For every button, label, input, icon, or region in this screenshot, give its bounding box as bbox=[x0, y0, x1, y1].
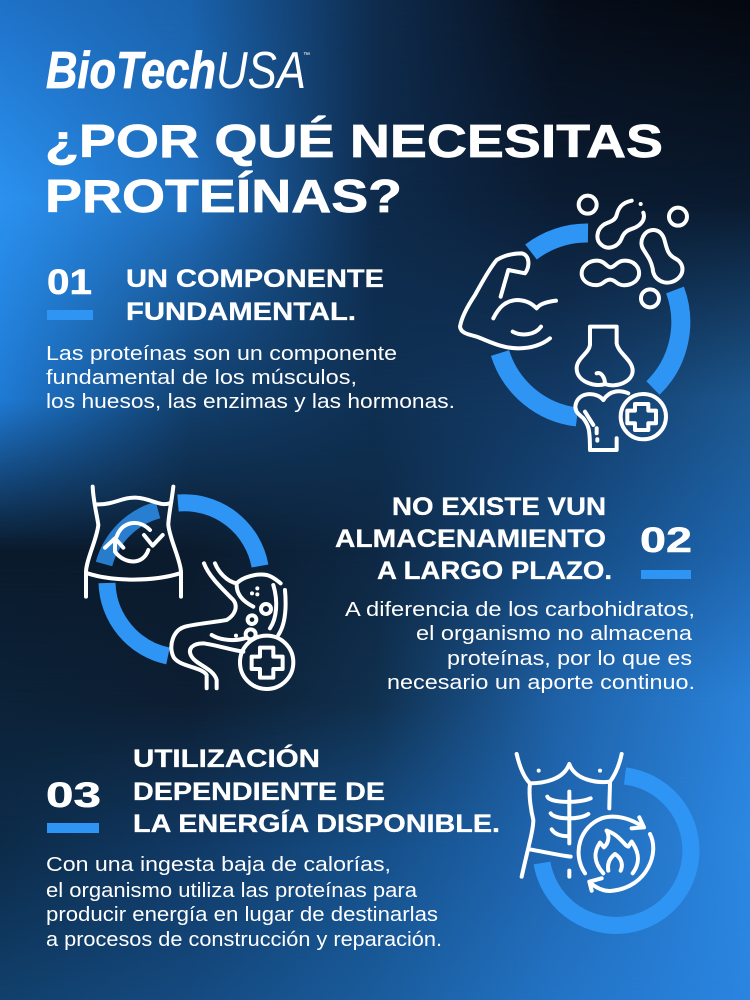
body text 02: proteínas, por lo que es bbox=[447, 648, 692, 670]
title: PROTEÍNAS? bbox=[45, 170, 402, 222]
panel: section 02 bbox=[335, 493, 695, 694]
body text 01: fundamental de los músculos, bbox=[46, 367, 357, 389]
panel: section 01 bbox=[46, 263, 455, 413]
ring arc bbox=[542, 776, 691, 925]
line drawing bbox=[86, 487, 293, 689]
ring arcs bbox=[500, 233, 681, 417]
heading 02: ALMACENAMIENTO bbox=[335, 525, 606, 553]
number 03: 03 bbox=[46, 776, 101, 815]
line drawing bbox=[517, 754, 653, 891]
body text 03: Con una ingesta baja de calorías, bbox=[46, 854, 391, 876]
body text 01: Las proteínas son un componente bbox=[46, 343, 397, 365]
heading 03 bbox=[133, 743, 500, 838]
bar 03 bbox=[47, 823, 99, 833]
bar 01 bbox=[47, 310, 93, 320]
logo: BioTech bbox=[46, 42, 216, 100]
panel: section 03 bbox=[46, 743, 500, 951]
heading 01: UN COMPONENTE bbox=[126, 265, 384, 293]
heading 01 bbox=[126, 265, 384, 326]
body text 03 bbox=[46, 854, 442, 951]
bar 02 bbox=[641, 570, 691, 579]
title bbox=[45, 115, 663, 222]
body text 02: necesario un aporte continuo. bbox=[387, 672, 695, 694]
heading 03: DEPENDIENTE DE bbox=[133, 778, 385, 806]
heading 02: NO EXISTE VUN bbox=[392, 493, 606, 521]
body text 02: el organismo no almacena bbox=[416, 623, 693, 645]
ring arcs bbox=[104, 503, 260, 656]
heading 03: LA ENERGÍA DISPONIBLE. bbox=[133, 809, 500, 838]
number 01: 01 bbox=[47, 263, 92, 302]
body text 02: A diferencia de los carbohidratos, bbox=[345, 599, 695, 621]
icon: muscle, molecules and bone ring bbox=[460, 196, 687, 450]
body text 01 bbox=[46, 343, 455, 413]
body text 01: los huesos, las enzimas y las hormonas. bbox=[46, 391, 455, 413]
title: ¿POR QUÉ NECESITAS bbox=[45, 115, 663, 167]
icon: waist and stomach ring bbox=[86, 487, 293, 689]
body text 03: el organismo utiliza las proteínas para bbox=[46, 880, 418, 902]
heading 01: FUNDAMENTAL. bbox=[126, 298, 356, 326]
heading 02: A LARGO PLAZO. bbox=[377, 557, 612, 585]
icon: abdomen and flame ring bbox=[517, 754, 691, 925]
logo: USA bbox=[216, 42, 306, 100]
body text 02 bbox=[345, 599, 695, 694]
line drawing bbox=[460, 196, 687, 450]
body text 03: a procesos de construcción y reparación. bbox=[46, 929, 442, 951]
heading 02 bbox=[335, 493, 612, 585]
heading 03: UTILIZACIÓN bbox=[133, 743, 320, 773]
body text 03: producir energía en lugar de destinarlas bbox=[46, 904, 438, 926]
logo: ™ bbox=[303, 52, 310, 59]
number 02: 02 bbox=[640, 521, 692, 560]
